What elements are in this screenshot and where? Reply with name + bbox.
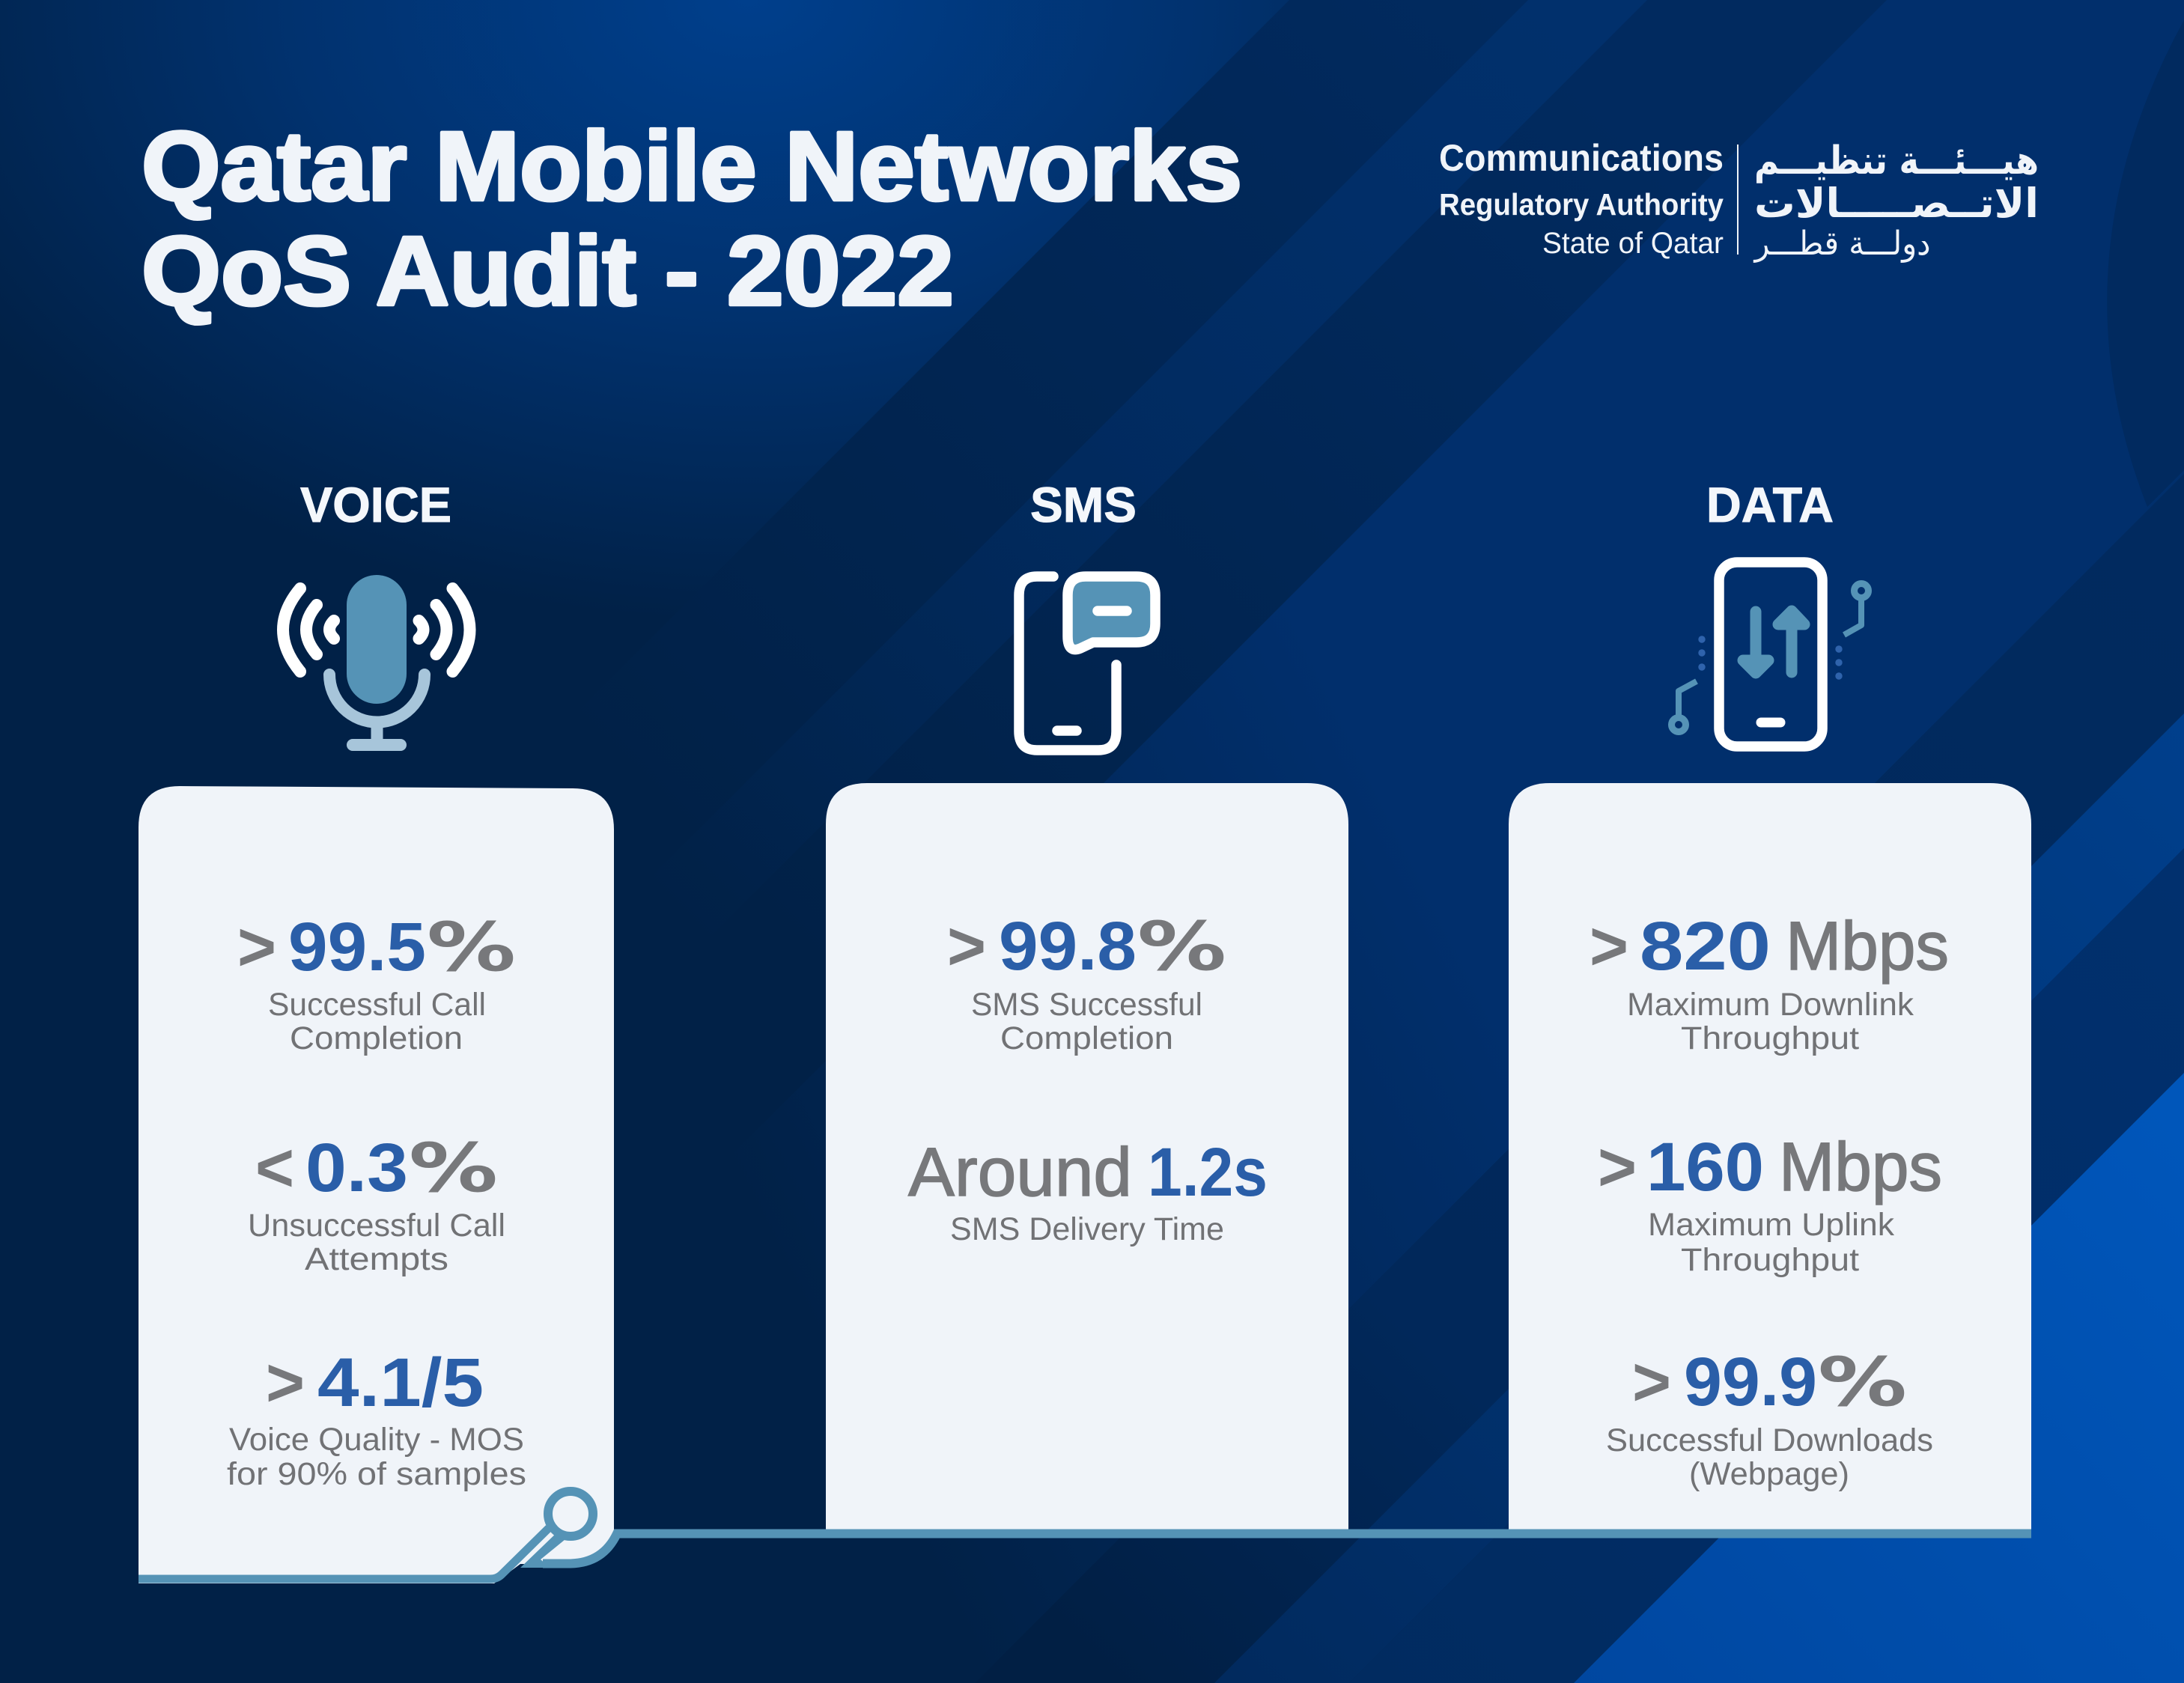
- icon: microphone: [283, 575, 470, 745]
- stat: voice quality: for 90% of samples: [227, 1456, 526, 1492]
- stat: downlink: 820: [1640, 908, 1771, 984]
- panel: DATA: [1509, 783, 2031, 1530]
- title: [142, 111, 1242, 326]
- stat: call completion: >: [237, 909, 276, 985]
- stat: SMS delivery time: Around: [908, 1134, 1132, 1211]
- logo English text: Regulatory Authority: [1439, 187, 1724, 222]
- logo Arabic text: الاتــصـــــالات: [1754, 180, 2039, 227]
- icon: phone with data arrows: [1671, 562, 1869, 746]
- stat: uplink: Maximum Uplink: [1648, 1207, 1895, 1243]
- connector line with ring node: [139, 1491, 2031, 1579]
- stat: SMS success: %: [1137, 907, 1226, 986]
- stat: unsuccessful attempts: Attempts: [305, 1241, 448, 1277]
- stat: call completion: %: [427, 908, 516, 987]
- stat: downloads: >: [1632, 1344, 1671, 1420]
- stat: uplink: >: [1598, 1129, 1637, 1205]
- title: QoS Audit - 2022: [142, 216, 954, 326]
- logo Arabic text: هيـــئـــة تنظيـــم: [1754, 139, 2039, 183]
- logo English text: Communications: [1439, 137, 1724, 179]
- stat: uplink: 160: [1646, 1129, 1764, 1205]
- stat: downlink: [1590, 908, 1949, 1056]
- logo Arabic text: [1753, 139, 2039, 263]
- stat: SMS success: [947, 907, 1226, 1056]
- stat: downlink: >: [1590, 908, 1628, 984]
- logo English text: State of Qatar: [1542, 227, 1724, 260]
- logo Arabic text: دولـــة قطـــر: [1753, 225, 1930, 263]
- stat: uplink: [1598, 1129, 1942, 1278]
- stat: voice quality: [227, 1345, 526, 1492]
- panel: SMS: [826, 783, 1348, 1530]
- stat: unsuccessful attempts: [248, 1129, 505, 1277]
- icon: phone with SMS bubble: [1019, 576, 1155, 750]
- stat: SMS delivery time: SMS Delivery Time: [950, 1211, 1224, 1247]
- logo English text: [1439, 137, 1724, 260]
- stat: call completion: Successful Call: [268, 987, 486, 1023]
- stat: downloads: %: [1818, 1343, 1907, 1422]
- stat: downloads: 99.9: [1684, 1344, 1817, 1420]
- stat: downlink: Throughput: [1681, 1020, 1859, 1056]
- stat: unsuccessful attempts: 0.3: [305, 1130, 408, 1206]
- stat: downloads: [1606, 1343, 1933, 1492]
- heading: VOICE: VOICE: [300, 477, 451, 532]
- stat: voice quality: 4.1/5: [317, 1345, 484, 1421]
- heading: SMS: SMS: [1030, 477, 1137, 532]
- stat: downloads: (Webpage): [1689, 1456, 1849, 1492]
- logo: Communications Regulatory Authority: [1439, 137, 2039, 263]
- stat: call completion: Completion: [290, 1020, 463, 1056]
- stat: voice quality: Voice Quality - MOS: [229, 1422, 524, 1458]
- stat: SMS delivery time: [908, 1134, 1268, 1247]
- stat: downloads: Successful Downloads: [1606, 1422, 1933, 1458]
- stat: unsuccessful attempts: <: [255, 1130, 294, 1206]
- panel: VOICE: [139, 786, 614, 1583]
- stat: unsuccessful attempts: Unsuccessful Call: [248, 1208, 505, 1244]
- stat: call completion: [237, 908, 516, 1056]
- stat: call completion: 99.5: [288, 909, 426, 985]
- stat: SMS success: Completion: [1000, 1020, 1173, 1056]
- title: Qatar Mobile Networks: [142, 111, 1242, 221]
- stat: uplink: Throughput: [1681, 1242, 1859, 1278]
- stat: unsuccessful attempts: %: [409, 1129, 498, 1208]
- stat: downlink: Mbps: [1786, 908, 1949, 984]
- stat: SMS success: 99.8: [999, 908, 1137, 984]
- stat: SMS success: SMS Successful: [971, 987, 1202, 1023]
- stat: SMS delivery time: 1.2s: [1148, 1134, 1268, 1211]
- heading: DATA: DATA: [1706, 477, 1834, 532]
- stat: voice quality: >: [266, 1345, 305, 1421]
- stat: downlink: Maximum Downlink: [1627, 987, 1914, 1023]
- stat: uplink: Mbps: [1779, 1129, 1942, 1205]
- stat: SMS success: >: [947, 908, 986, 984]
